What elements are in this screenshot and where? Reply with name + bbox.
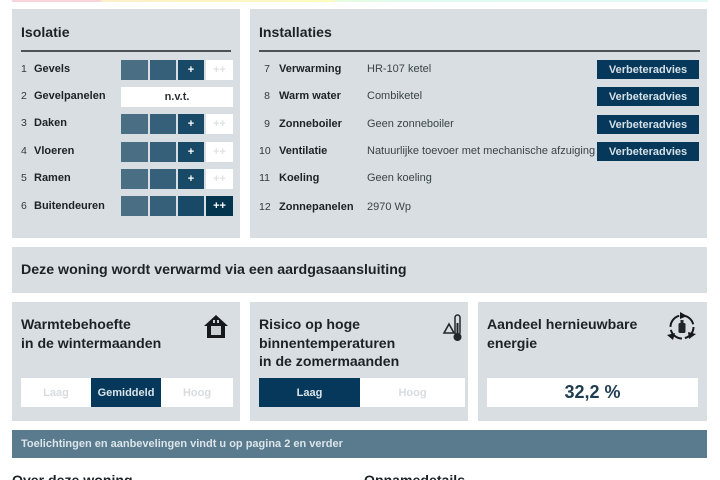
heading: Installaties: Installaties (259, 24, 332, 40)
row 2 Gevelpanelen (21, 87, 233, 107)
scale: Laag: Laag (297, 387, 322, 399)
row 9 Zonneboiler: Geen zonneboiler (367, 118, 454, 130)
value: 32,2 %: 32,2 % (564, 382, 621, 402)
row 7 Verwarming (264, 63, 431, 75)
bar: toelichtingen: Toelichtingen en aanbevelingen vindt u op pagina 2 en verder (21, 438, 343, 450)
row 12 Zonnepanelen: 2970 Wp (367, 201, 411, 213)
scale: Hoog: Hoog (398, 387, 427, 399)
row 2 Gevelpanelen: 2 (21, 90, 27, 102)
scale: Hoog (161, 378, 233, 407)
heading: Warmtebehoefte (21, 316, 161, 350)
button: Verbeteradvies 10 (597, 142, 699, 161)
button: Verbeteradvies 8 (597, 87, 699, 106)
panel: Isolatie (12, 9, 240, 238)
heading: Warmtebehoefte: in de wintermaanden (21, 334, 161, 350)
row 1 Gevels: Gevels (34, 63, 70, 75)
row 4 Vloeren: 4 (21, 145, 27, 157)
row 1 Gevels: ++ (213, 64, 226, 76)
row 5 Ramen: ++ (213, 173, 226, 185)
scale: Hoog: Hoog (183, 387, 211, 399)
row 11 Koeling: Geen koeling (367, 172, 432, 184)
scale: Hoog (360, 378, 465, 407)
panel: Aandeel hernieuwbare energie (478, 302, 707, 421)
bar: toelichtingen (12, 430, 707, 458)
row 4 Vloeren: ++ (213, 146, 226, 158)
row 12 Zonnepanelen: Zonnepanelen (279, 201, 354, 213)
row 1 Gevels: + (188, 64, 194, 76)
panel: Warmtebehoefte (12, 302, 240, 421)
heading: Risico: binnentemperaturen (259, 334, 395, 350)
row 4 Vloeren (21, 142, 233, 162)
row 5 Ramen (21, 169, 233, 189)
scale: Gemiddeld: Gemiddeld (98, 387, 154, 399)
button: Verbeteradvies 9: Verbeteradvies (609, 119, 687, 131)
row 7 Verwarming: HR-107 ketel (367, 63, 431, 75)
row 3 Daken (21, 114, 233, 134)
scale: Laag: Laag (43, 387, 69, 399)
heading: Isolatie: Isolatie (21, 24, 70, 40)
panel: Installaties (250, 9, 707, 238)
heading: Aandeel: energie (487, 334, 537, 350)
row 10 Ventilatie (259, 145, 595, 157)
row 11 Koeling: 11 (259, 172, 270, 184)
row 4 Vloeren: Vloeren (34, 145, 74, 157)
icon: thermometer with warning (442, 314, 462, 341)
value: 32,2 % (487, 378, 698, 407)
row 8 Warm water: Warm water (279, 90, 341, 102)
row 5 Ramen: + (188, 173, 194, 185)
row 11 Koeling: Koeling (279, 172, 319, 184)
row 6 Buitendeuren (21, 196, 233, 216)
row 2 Gevelpanelen: n.v.t. (165, 91, 189, 103)
heading: Risico: Risico op hoge (259, 316, 360, 332)
button: Verbeteradvies 10: Verbeteradvies (609, 146, 687, 158)
row 11 Koeling (259, 172, 432, 184)
icon: house (204, 315, 228, 338)
heading: Warmtebehoefte: Warmtebehoefte (21, 316, 131, 332)
top colour strip (12, 0, 708, 2)
row 12 Zonnepanelen (259, 201, 411, 213)
row 8 Warm water: Combiketel (367, 90, 422, 102)
row 6 Buitendeuren: Buitendeuren (34, 200, 105, 212)
icon: renewable cycle (667, 312, 696, 340)
row 10 Ventilatie: 10 (259, 145, 271, 157)
banner: aardgasaansluiting (12, 247, 707, 293)
scale: Laag (21, 378, 91, 407)
heading: Risico (259, 316, 399, 369)
row 2 Gevelpanelen: Gevelpanelen (34, 90, 106, 102)
row 5 Ramen: Ramen (34, 172, 71, 184)
row 1 Gevels: 1 (21, 63, 27, 75)
row 9 Zonneboiler (264, 118, 454, 130)
row 3 Daken: Daken (34, 117, 67, 129)
heading: Risico: in de zomermaanden (259, 353, 399, 369)
row 3 Daken: + (188, 118, 194, 130)
row 8 Warm water: 8 (264, 90, 270, 102)
heading: Aandeel: Aandeel hernieuwbare (487, 316, 637, 332)
row 6 Buitendeuren: 6 (21, 200, 27, 212)
scale: Laag (259, 378, 360, 407)
row 12 Zonnepanelen: 12 (259, 201, 271, 213)
button: Verbeteradvies 7 (597, 60, 699, 79)
row 1 Gevels (21, 60, 233, 80)
heading: Aandeel (487, 316, 637, 351)
row 9 Zonneboiler: Zonneboiler (279, 118, 342, 130)
panel: Risico op hoge binnentemperaturen (250, 302, 468, 421)
row 5 Ramen: 5 (21, 172, 27, 184)
row 7 Verwarming: Verwarming (279, 63, 341, 75)
banner: aardgasaansluiting: Deze woning wordt verwarmd via een aardgasaansluiting (21, 262, 407, 278)
row 8 Warm water (264, 90, 422, 102)
button: Verbeteradvies 9 (597, 115, 699, 134)
row 3 Daken: 3 (21, 117, 27, 129)
button: Verbeteradvies 8: Verbeteradvies (609, 91, 687, 103)
scale: Gemiddeld (91, 378, 161, 407)
row 3 Daken: ++ (213, 118, 226, 130)
row 4 Vloeren: + (188, 146, 194, 158)
row 10 Ventilatie: Natuurlijke toevoer met mechanische afzuiging (367, 145, 595, 157)
row 9 Zonneboiler: 9 (264, 118, 270, 130)
row 7 Verwarming: 7 (264, 63, 270, 75)
row 6 Buitendeuren: ++ (213, 200, 226, 212)
button: Verbeteradvies 7: Verbeteradvies (609, 64, 687, 76)
row 10 Ventilatie: Ventilatie (279, 145, 327, 157)
